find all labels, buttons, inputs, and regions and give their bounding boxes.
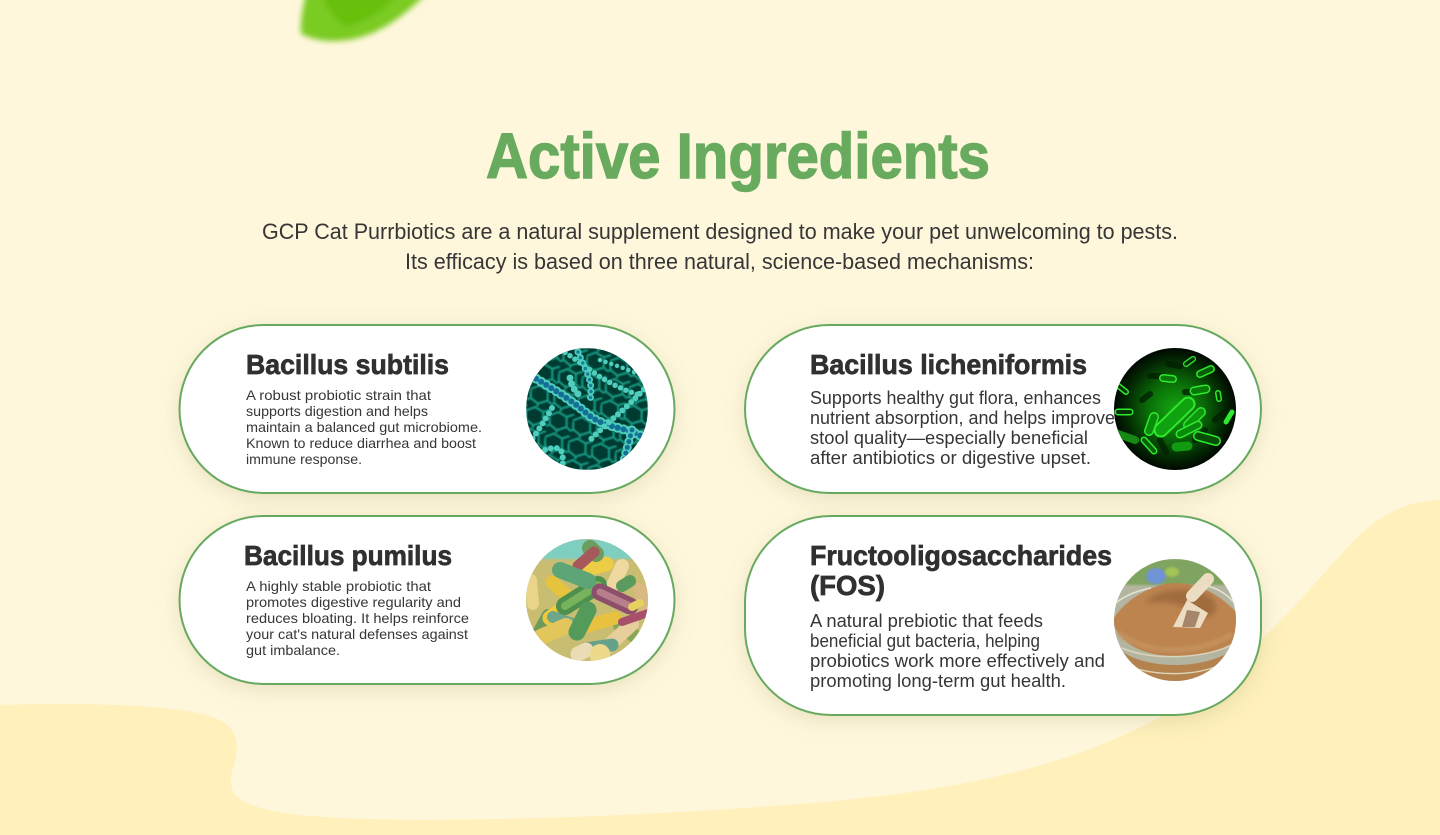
description: Bacillus subtilis: maintain a balanced gut microbiome.: [246, 419, 482, 435]
image: teal bacteria chains: [526, 348, 648, 470]
description: Bacillus pumilus: [246, 578, 469, 658]
description: Bacillus pumilus: reduces bloating. It helps reinforce: [246, 610, 469, 626]
description: Bacillus subtilis: supports digestion and helps: [246, 403, 428, 419]
heading: Bacillus licheniformis: Bacillus licheniformis: [810, 349, 1087, 380]
description: Bacillus subtilis: A robust probiotic strain that: [246, 387, 431, 403]
intro text: GCP Cat Purrbiotics are a natural supplement designed to make your pet unwelcoming to pests.: [262, 219, 1178, 244]
description: Fructooligosaccharides (FOS): beneficial gut bacteria, helping: [810, 631, 1040, 651]
description: Bacillus subtilis: Known to reduce diarrhea and boost: [246, 435, 476, 451]
description: Bacillus pumilus: your cat's natural defenses against: [246, 626, 468, 642]
heading: Fructooligosaccharides (FOS): [810, 540, 1112, 601]
image: powder in glass bowl with scoop: [1114, 559, 1236, 681]
intro text: Its efficacy is based on three natural, science-based mechanisms:: [405, 249, 1034, 274]
panel: Bacillus pumilus: [180, 516, 674, 684]
description: Fructooligosaccharides (FOS): promoting long-term gut health.: [810, 671, 1066, 691]
heading: Bacillus subtilis: Bacillus subtilis: [246, 349, 449, 380]
description: Bacillus licheniformis: [810, 388, 1115, 468]
title: Active Ingredients: [486, 120, 990, 192]
description: Bacillus licheniformis: Supports healthy gut flora, enhances: [810, 388, 1101, 408]
heading: Fructooligosaccharides (FOS): Fructooligosaccharides: [810, 540, 1112, 571]
description: Bacillus pumilus: A highly stable probiotic that: [246, 578, 431, 594]
description: Bacillus subtilis: [246, 387, 482, 467]
background blob: bottom wave: [0, 500, 1440, 835]
heading: Bacillus pumilus: Bacillus pumilus: [244, 540, 452, 571]
image: colourful probiotic rods: [526, 539, 648, 661]
description: Bacillus licheniformis: after antibiotics or digestive upset.: [810, 448, 1091, 468]
panel: Bacillus subtilis: [180, 325, 674, 493]
panel: Fructooligosaccharides (FOS): [745, 516, 1261, 715]
description: Bacillus licheniformis: stool quality—especially beneficial: [810, 428, 1088, 448]
decorative leaf: [301, 0, 426, 41]
intro text: [262, 219, 1178, 274]
description: Bacillus subtilis: immune response.: [246, 451, 362, 467]
description: Fructooligosaccharides (FOS): probiotics work more effectively and: [810, 651, 1105, 671]
description: Bacillus licheniformis: nutrient absorption, and helps improve: [810, 408, 1115, 428]
description: Bacillus pumilus: gut imbalance.: [246, 642, 340, 658]
description: Bacillus pumilus: promotes digestive regularity and: [246, 594, 461, 610]
description: Fructooligosaccharides (FOS): A natural prebiotic that feeds: [810, 611, 1043, 631]
heading: Fructooligosaccharides (FOS): (FOS): [810, 570, 885, 601]
image: green glowing bacteria: [1114, 348, 1236, 470]
panel: Bacillus licheniformis: [745, 325, 1261, 493]
description: Fructooligosaccharides (FOS): [810, 611, 1105, 691]
